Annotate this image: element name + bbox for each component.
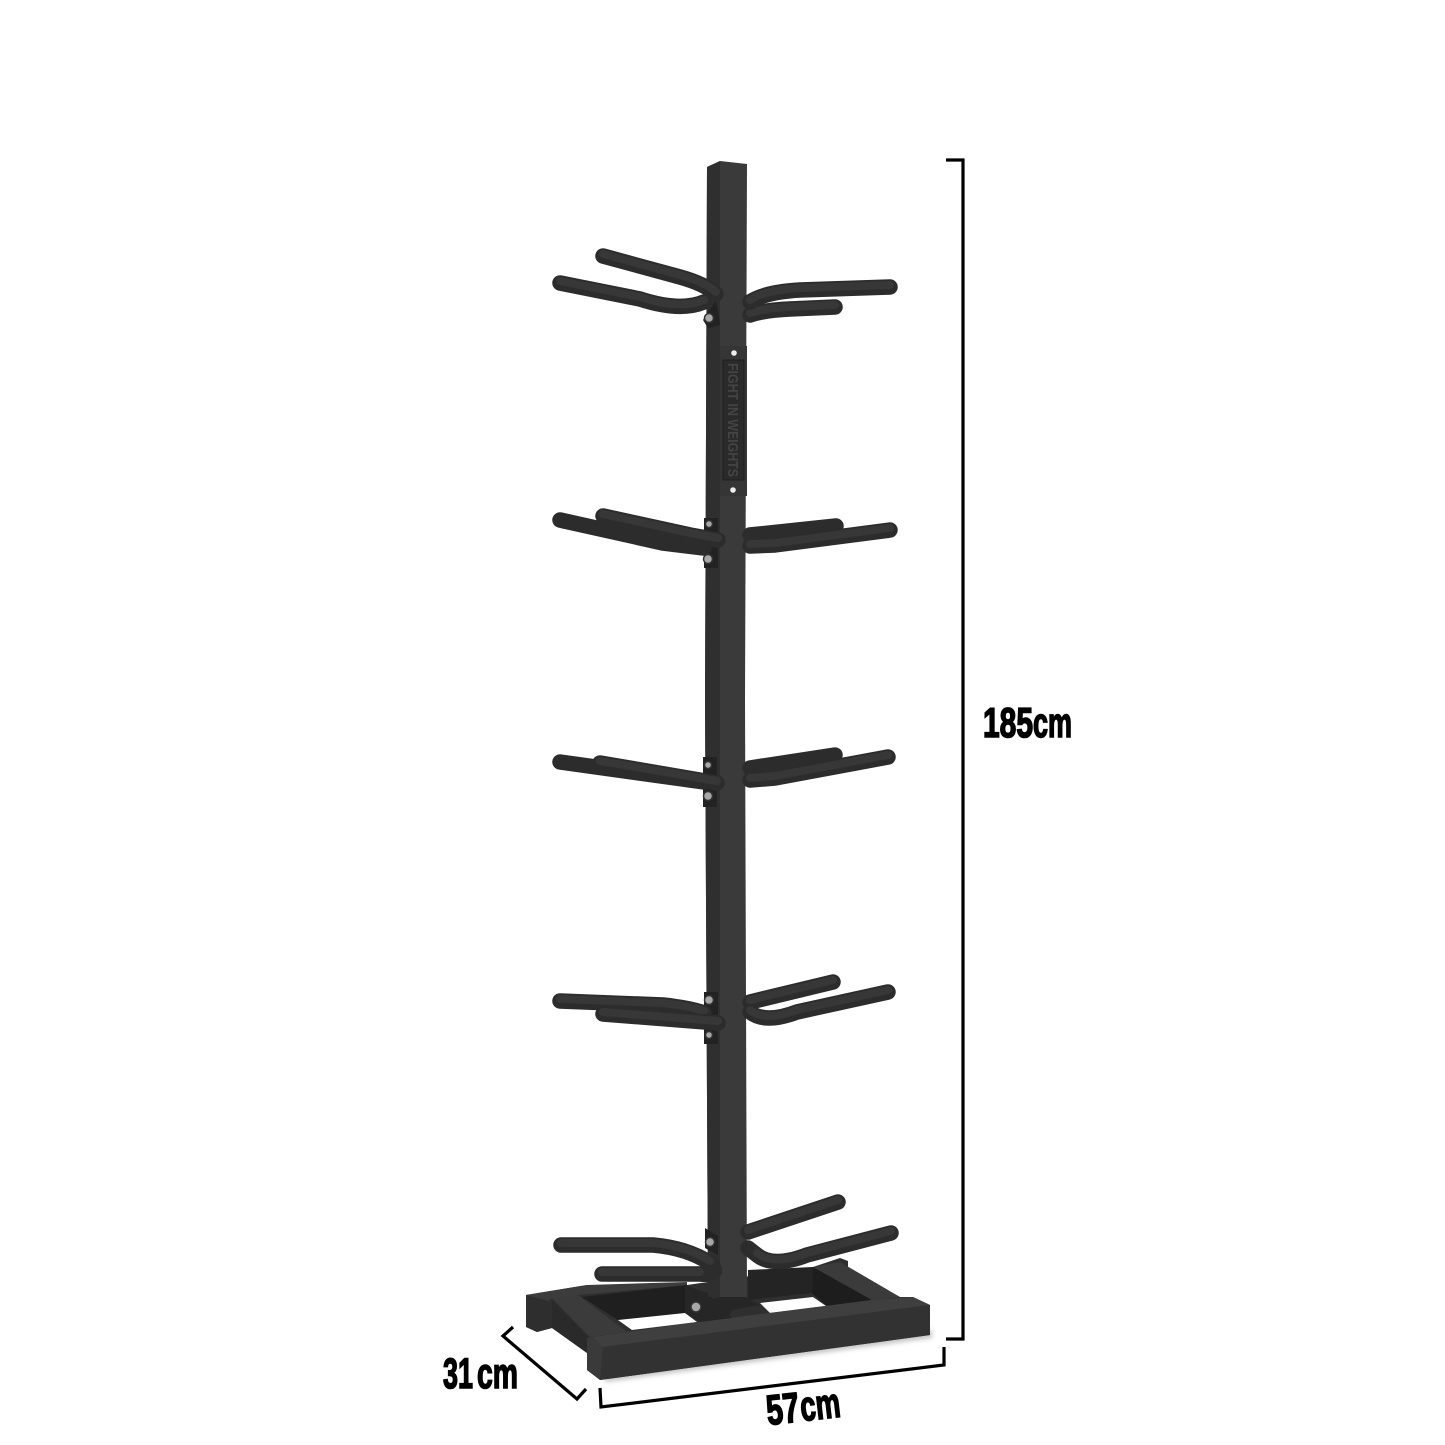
- label: width: 57: [764, 1384, 802, 1434]
- height dimension bracket: [946, 160, 963, 1339]
- label: width: cm: [797, 1379, 843, 1430]
- tier 5 pegs: [561, 1200, 891, 1274]
- label: height: cm: [1033, 699, 1072, 746]
- tier 4 pegs: [560, 980, 888, 1044]
- central post: [705, 161, 760, 1317]
- width dimension bracket: [600, 1347, 944, 1407]
- label: width: [764, 1379, 843, 1434]
- tier 3 pegs: [560, 755, 888, 807]
- label: depth: 31: [443, 1350, 473, 1398]
- logo plate: FIGHT IN WEIGHTS: [724, 363, 741, 477]
- label: height: 185: [983, 699, 1033, 746]
- rack base: [526, 1258, 932, 1382]
- tier 2 pegs: [560, 514, 890, 568]
- label: depth: [443, 1350, 518, 1398]
- logo plate: [720, 346, 747, 496]
- tier 1 pegs: [560, 254, 890, 328]
- label: depth: cm: [477, 1350, 518, 1398]
- depth dimension bracket: [503, 1327, 586, 1399]
- rack illustration: [526, 161, 932, 1382]
